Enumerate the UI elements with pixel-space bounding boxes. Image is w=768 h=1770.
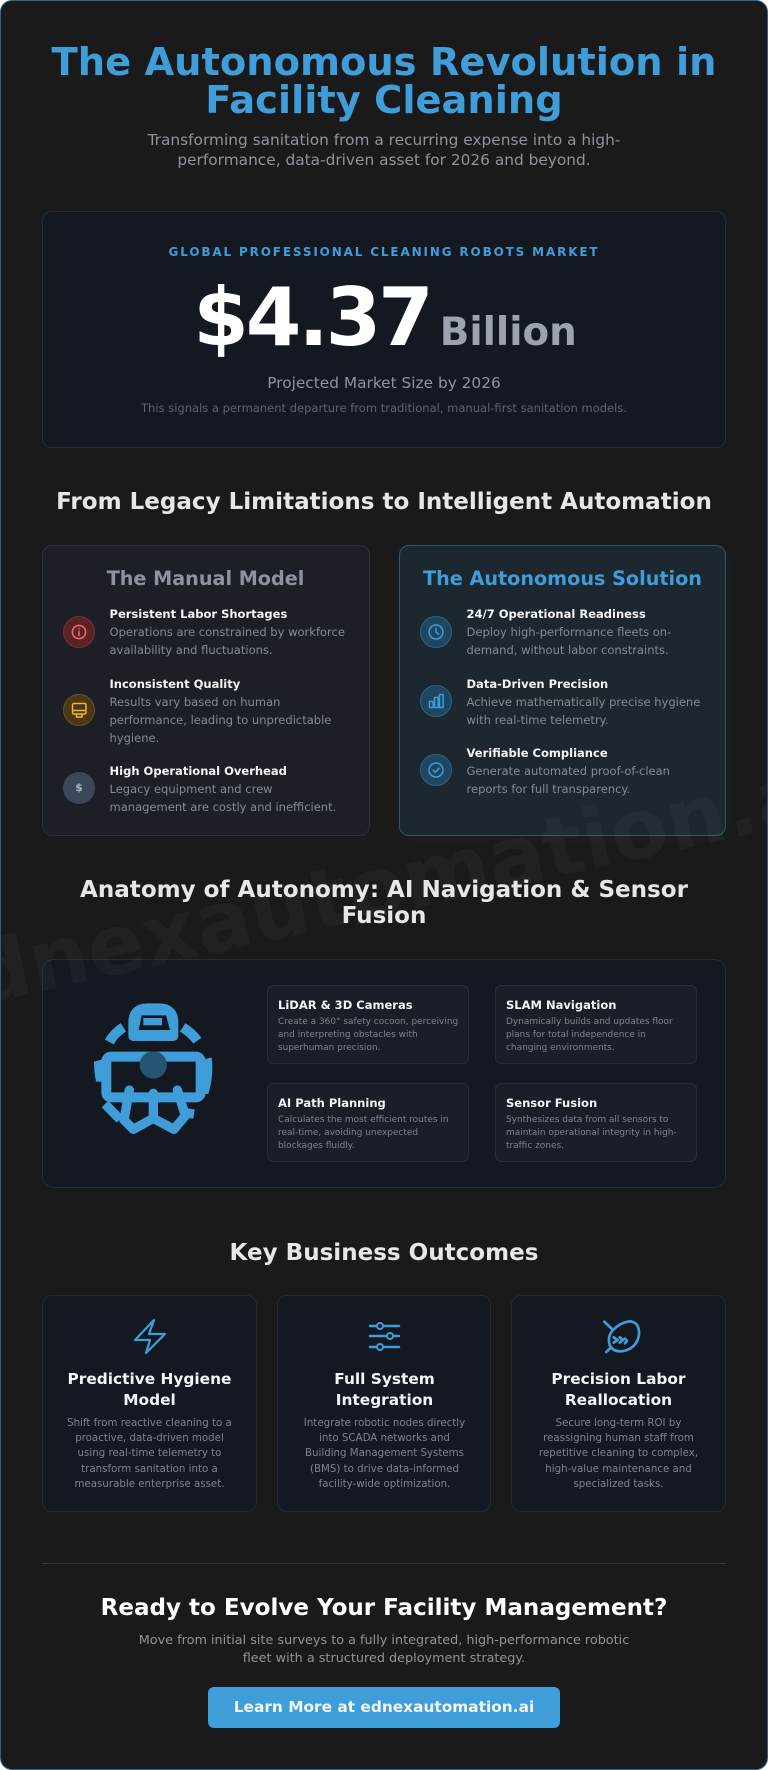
item: compliance: Generate automated proof-of-clean [466,764,670,778]
icon: alert [63,616,95,648]
card title [551,1370,686,1408]
card text: high-value maintenance and [545,1463,692,1475]
item: high overhead [110,764,336,814]
card title: Integration [336,1390,433,1408]
panel: labor reallocation [511,1295,726,1512]
item: precision: with real-time telemetry. [466,713,609,727]
item: precision: Achieve mathematically precise hygiene [466,695,700,709]
subtitle: performance, data-driven asset for 2026 and beyond. [177,151,591,169]
card text: transform sanitation into a [81,1463,218,1475]
card text [67,1416,232,1490]
panel: market size hero [42,211,726,448]
icon: head with arrows [602,1320,640,1354]
item: labor shortages: Persistent Labor Shortages [110,607,287,621]
heading: anatomy of autonomy: Fusion [342,903,426,929]
panel heading: The Autonomous Solution [423,567,702,590]
card text: and interpreting obstacles with [278,1030,418,1040]
subtitle [148,130,620,169]
item: high overhead: management are costly and inefficient. [110,800,336,814]
item: inconsistent quality: performance, leading to unpredictable [110,713,331,727]
cta button [208,1687,560,1728]
item: labor shortages [110,607,345,657]
card text: blockages fluidly. [278,1140,355,1150]
item: labor shortages: Operations are constrained by workforce [110,625,345,639]
item: high overhead: Legacy equipment and crew [110,782,273,796]
heading: key business outcomes: Key Business Outcomes [230,1240,538,1266]
panel: anatomy [42,959,726,1188]
icon: bolt [134,1318,166,1354]
card text: into SCADA networks and [319,1432,450,1444]
card title: SLAM Navigation [506,998,616,1012]
item: compliance [466,746,670,796]
card text: real-time, avoiding unexpected [278,1128,418,1138]
card title [68,1370,231,1408]
card title: Reallocation [565,1390,672,1408]
card text: Building Management Systems [305,1447,464,1459]
title [52,40,716,123]
item: high overhead: High Operational Overhead [110,764,287,778]
panel: predictive hygiene [42,1295,257,1512]
card text [304,1416,465,1490]
card text: Create a 360° safety cocoon, perceiving [278,1016,458,1026]
card text: using real-time telemetry to [78,1447,221,1459]
card text: (BMS) to drive data-informed [310,1463,459,1475]
item: precision: Data-Driven Precision [466,677,608,691]
card text [506,1114,677,1150]
card text: facility-wide optimization. [319,1478,450,1490]
card text: Dynamically builds and updates floor [506,1016,673,1026]
item: readiness: 24/7 Operational Readiness [466,607,646,621]
card title: Precision Labor [551,1370,686,1388]
card text: traffic zones. [506,1140,564,1150]
card text: Secure long-term ROI by [556,1416,681,1428]
icon: bars [420,685,452,717]
card text: Synthesizes data from all sensors to [506,1114,668,1124]
card text: repetitive cleaning to complex, [539,1447,698,1459]
item: inconsistent quality: Inconsistent Quality [110,677,240,691]
icon: clock [420,616,452,648]
heading: anatomy of autonomy [80,877,688,929]
icon: robot [94,1003,212,1134]
cta button: Learn More at ednexautomation.ai [234,1698,534,1716]
card title: Sensor Fusion [506,1096,597,1110]
item: precision [466,677,700,727]
item: inconsistent quality: Results vary based on human [110,695,280,709]
icon: dollar: $ [75,781,83,794]
card text: superhuman precision. [278,1042,380,1052]
card: sensor fusion [495,1083,697,1162]
card title [334,1370,435,1408]
card: lidar [267,985,469,1064]
icon: monitor [63,694,95,726]
card: slam [495,985,697,1064]
panel: system integration [277,1295,491,1512]
hero caption: Projected Market Size by 2026 [267,374,501,392]
item: compliance: Verifiable Compliance [466,746,608,760]
card text [278,1114,449,1150]
icon: dollar [63,772,95,804]
cta text: Move from initial site surveys to a fully integrated, high-performance robotic [139,1632,629,1648]
heading: legacy to automation: From Legacy Limitations to Intelligent Automation [56,489,712,515]
card text: specialized tasks. [573,1478,664,1490]
title: Facility Cleaning [205,78,563,123]
hero note: This signals a permanent departure from traditional, manual-first sanitation models. [141,401,627,415]
hero figure: $4.37Billion [193,271,577,364]
card title: Full System [334,1370,435,1388]
icon: check [420,754,452,786]
item: readiness: demand, without labor constraints. [466,643,669,657]
hero label: GLOBAL PROFESSIONAL CLEANING ROBOTS MARKET [169,245,599,259]
cta text: fleet with a structured deployment strategy. [243,1650,525,1666]
item: inconsistent quality: hygiene. [110,731,159,745]
item: compliance: reports for full transparency. [466,782,630,796]
card text: Integrate robotic nodes directly [304,1416,465,1428]
item: inconsistent quality [110,677,331,745]
heading: anatomy of autonomy: Anatomy of Autonomy: AI Navigation & Sensor [80,877,688,903]
card text: reassigning human staff from [543,1432,694,1444]
card text: changing environments. [506,1042,615,1052]
panel heading: The Manual Model [107,567,304,590]
card title: AI Path Planning [278,1096,386,1110]
card title: Model [123,1390,176,1408]
card text [506,1016,673,1052]
card text: maintain operational integrity in high- [506,1128,677,1138]
card text: plans for total independence in [506,1030,646,1040]
card text: measurable enterprise asset. [75,1478,224,1490]
card title: Predictive Hygiene [68,1370,231,1388]
card text: Shift from reactive cleaning to a [67,1416,232,1428]
cta heading: Ready to Evolve Your Facility Management? [101,1595,667,1621]
panel: autonomous solution [399,545,726,836]
title: The Autonomous Revolution in [52,40,716,85]
card: path planning [267,1083,469,1162]
card text: proactive, data-driven model [75,1432,224,1444]
card text [278,1016,458,1052]
card text: Calculates the most efficient routes in [278,1114,449,1124]
subtitle: Transforming sanitation from a recurring expense into a high- [148,130,620,148]
icon: sliders [368,1322,400,1351]
item: readiness: Deploy high-performance fleets on- [466,625,671,639]
item: readiness [466,607,671,657]
card title: LiDAR & 3D Cameras [278,998,413,1012]
item: labor shortages: availability and fluctuations. [110,643,273,657]
card text [539,1416,698,1490]
cta text [139,1632,629,1666]
panel: manual model [42,545,370,836]
